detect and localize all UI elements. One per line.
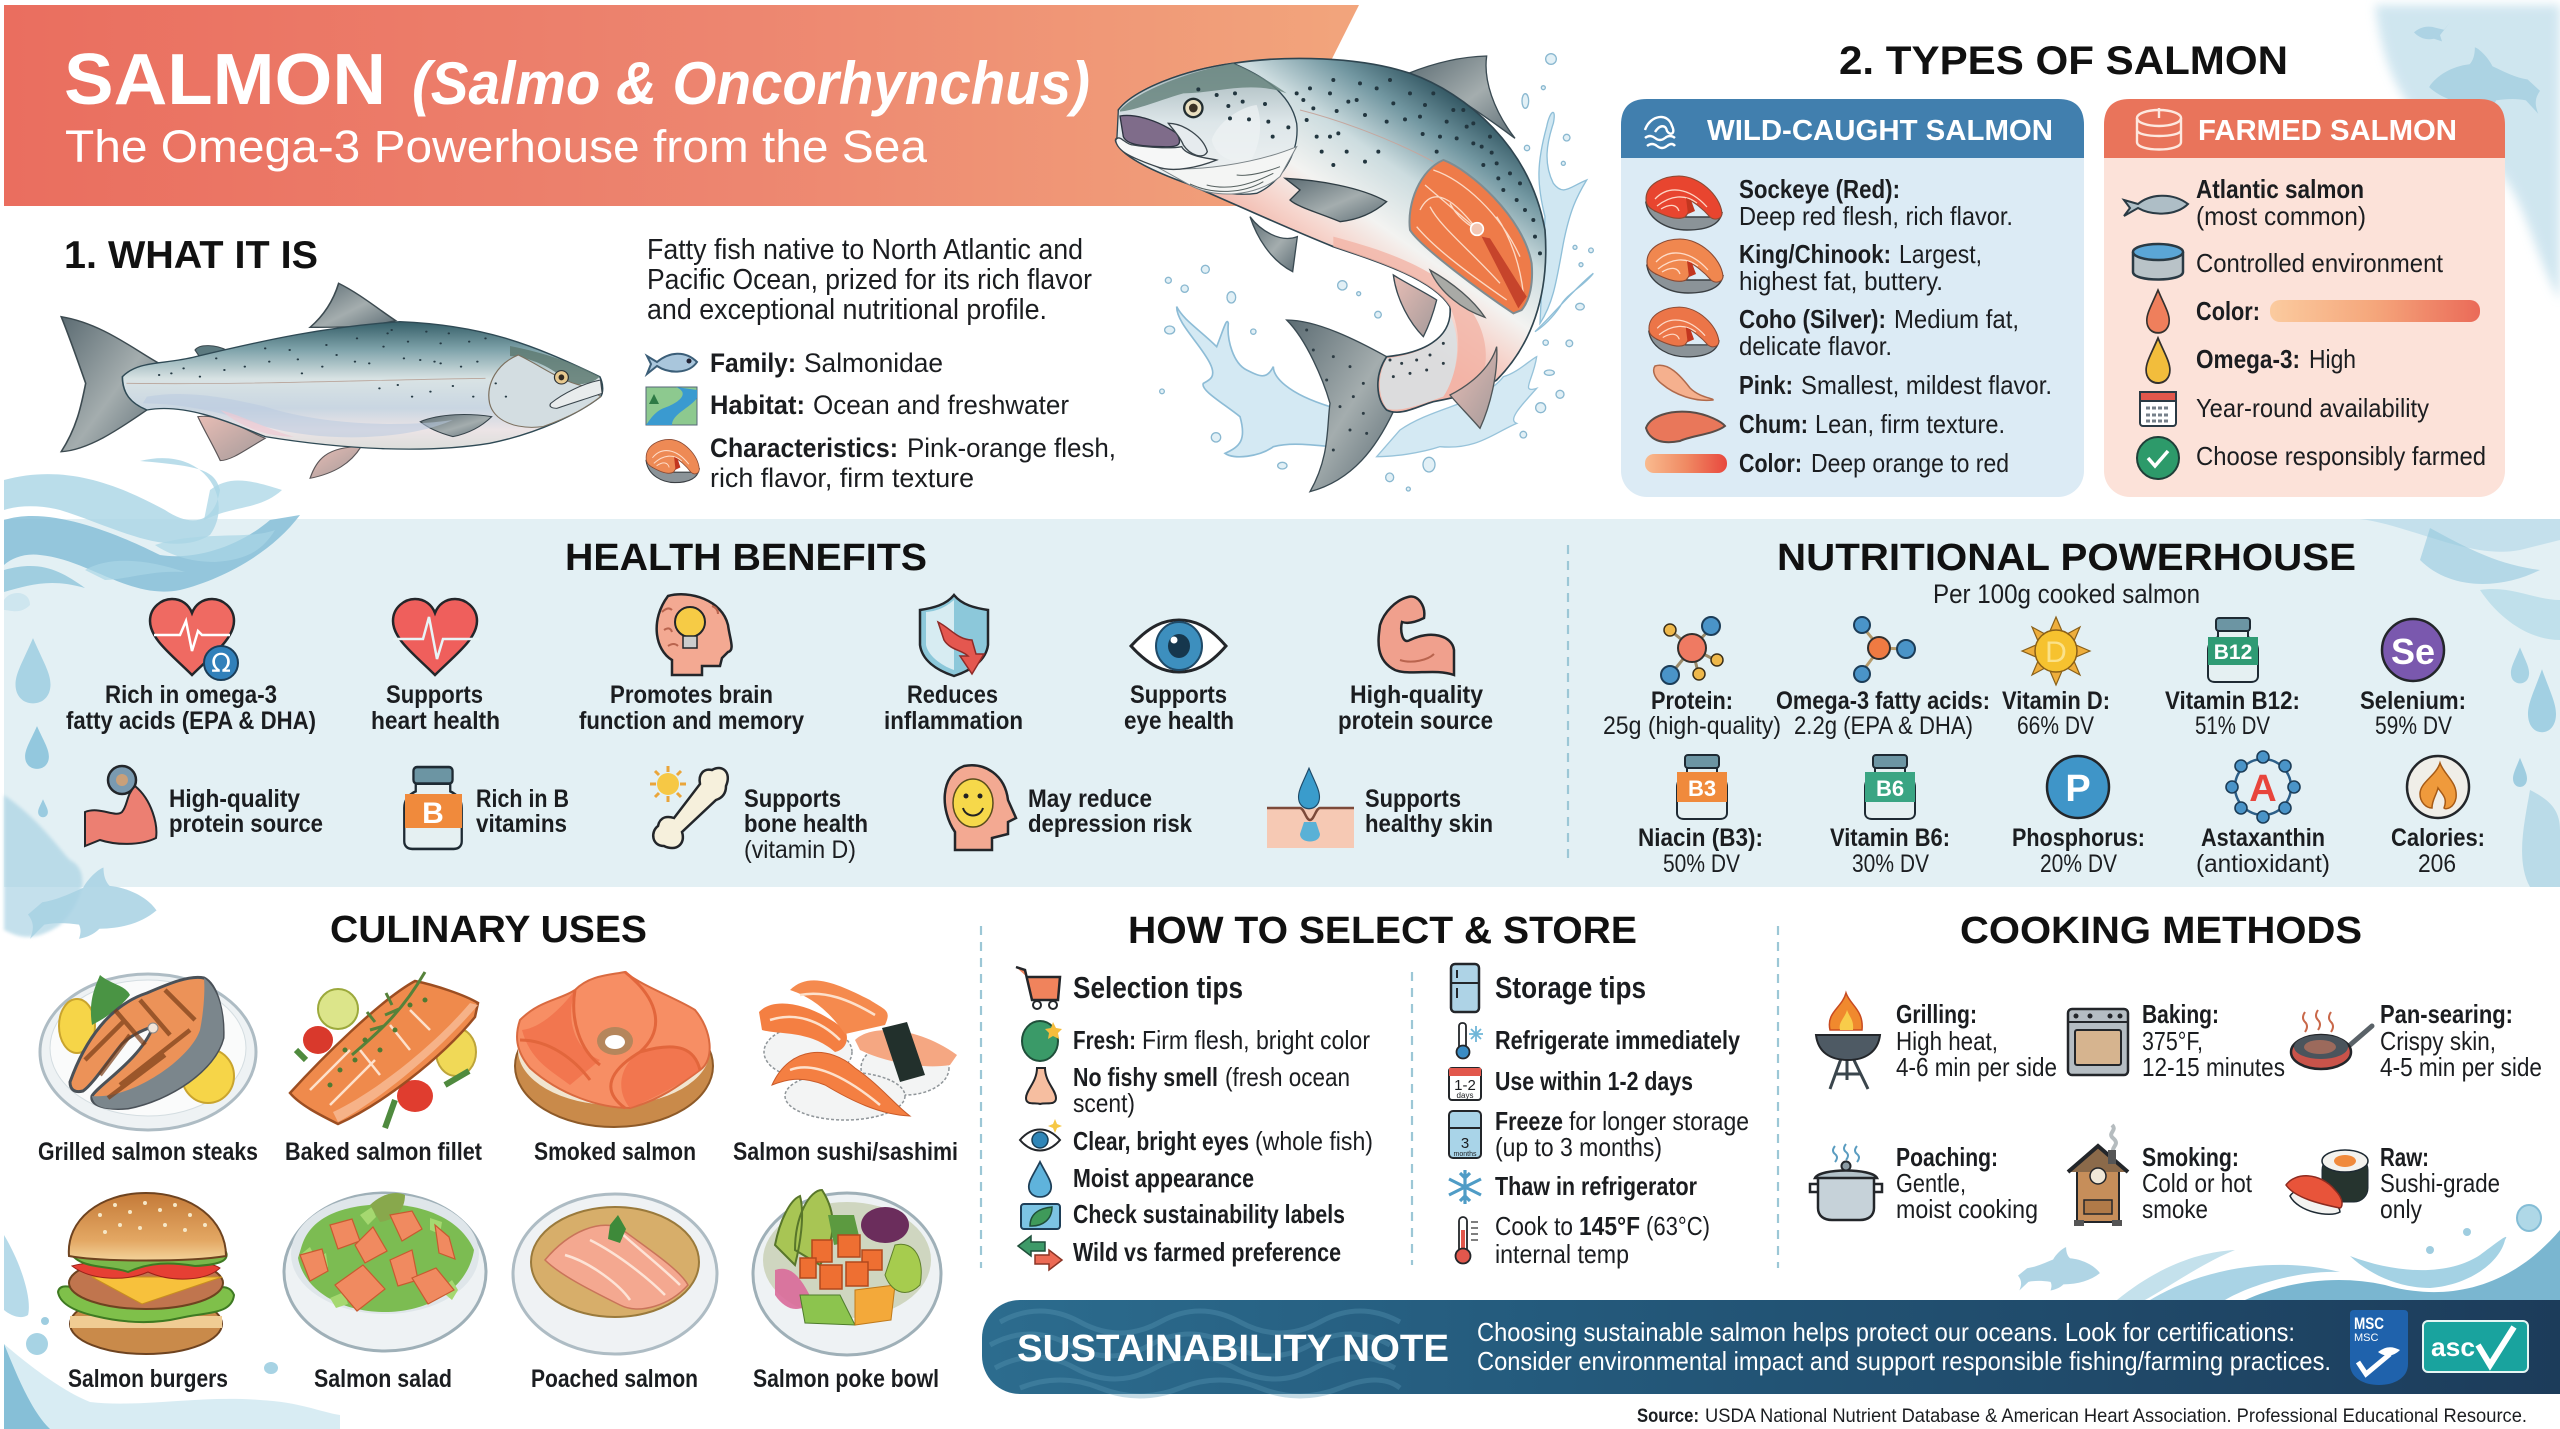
nutrient: phosphorus: Phosphorus: (2012, 824, 2145, 852)
use within (1449, 1066, 1693, 1100)
description (647, 234, 1092, 326)
moist: Moist appearance (1073, 1163, 1254, 1193)
method: grilling: High heat, (1896, 1026, 1998, 1056)
heading: HOW TO SELECT & STORE (1128, 910, 1637, 952)
eyes (1020, 1119, 1373, 1156)
nutrient: vitamin d (2002, 617, 2110, 740)
nutrient: vitamin b6: Vitamin B6: (1830, 824, 1950, 852)
description: Fatty fish native to North Atlantic and (647, 234, 1083, 266)
description: and exceptional nutritional profile. (647, 294, 1047, 326)
nutrient: calories: 206 (2418, 850, 2456, 878)
section: culinary uses (38, 909, 958, 1393)
food: smoked salmon bagel (515, 972, 713, 1127)
benefit: mood: depression risk (1028, 810, 1192, 838)
method: baking: 375°F, (2142, 1026, 2203, 1056)
pink (1654, 365, 2052, 400)
food labels: Poached salmon (531, 1365, 698, 1393)
benefit: skin: Supports (1365, 785, 1461, 813)
nutrient: vitamin b12: Vitamin B12: (2165, 687, 2300, 715)
section: nutritional powerhouse (1603, 537, 2485, 878)
benefit: bone: (vitamin D) (744, 836, 856, 864)
habitat row (646, 387, 1069, 425)
food labels: Grilled salmon steaks (38, 1138, 258, 1166)
benefit: b vitamins (404, 767, 569, 849)
heading: HEALTH BENEFITS (565, 537, 927, 579)
source line: Source: (1637, 1406, 1699, 1427)
nutrient: protein: Protein: (1651, 687, 1733, 715)
benefit: protein dumbbell arm: protein source (169, 810, 323, 838)
banner background (982, 1300, 2560, 1394)
method: baking: 12-15 minutes (2142, 1052, 2285, 1082)
cook to: (63°C) (1646, 1211, 1710, 1241)
characteristics row (646, 433, 1116, 493)
section: types of salmon (1621, 39, 2505, 497)
chum: Lean, firm texture. (1815, 409, 2005, 439)
method: raw sushi: Raw: (2380, 1142, 2429, 1172)
colour: Color: (1739, 448, 1802, 478)
banner wave pattern (990, 1311, 1400, 1396)
food: salmon burger (58, 1193, 234, 1354)
tail fin (1287, 320, 1393, 492)
coho: Coho (Silver): (1739, 304, 1886, 334)
nutrient: omega-3: Omega-3 fatty acids: (1776, 687, 1990, 715)
colour: Deep orange to red (1811, 448, 2009, 478)
benefit: brain: Promotes brain (610, 681, 773, 709)
icon: wave (1645, 117, 1675, 148)
icon: cart (1016, 967, 1060, 1009)
nutrient: calories: Calories: (2391, 824, 2485, 852)
nutrient: vitamin b6: B6 (1876, 776, 1904, 801)
benefit: heart health: Supports (386, 681, 483, 709)
smell: (fresh ocean (1225, 1062, 1350, 1092)
method: poaching: Gentle, (1896, 1168, 1966, 1198)
food labels: Salmon poke bowl (753, 1365, 939, 1393)
title: SALMON (64, 40, 386, 120)
controlled: Controlled environment (2196, 248, 2444, 278)
fresh: Fresh: (1073, 1025, 1136, 1055)
illustration: side view salmon (61, 283, 603, 478)
responsibly farmed: Choose responsibly farmed (2196, 441, 2486, 471)
description: Pacific Ocean, prized for its rich flavor (647, 264, 1092, 296)
section: health benefits (66, 537, 1493, 864)
cook to (1456, 1211, 1710, 1269)
nutrient: selenium: 59% DV (2375, 712, 2452, 740)
rear fins (1430, 270, 1497, 428)
method: poaching (1810, 1142, 2038, 1224)
nutrient: selenium (2360, 619, 2466, 740)
heading: 2. TYPES OF SALMON (1839, 39, 2288, 83)
belly pink (1333, 237, 1486, 397)
use within: 1-2 (1454, 1077, 1476, 1094)
coho: Medium fat, (1894, 304, 2019, 334)
method: smoking (2068, 1125, 2253, 1226)
nutrient: niacin: 50% DV (1663, 850, 1740, 878)
eye (1183, 98, 1204, 118)
cutaway salmon steak (1409, 160, 1532, 313)
smell: No fishy smell (1073, 1062, 1218, 1092)
wild header (1621, 99, 2084, 158)
nutrient: phosphorus: 20% DV (2040, 850, 2117, 878)
nutrient: astaxanthin: A (2249, 768, 2277, 810)
omega (2146, 338, 2356, 383)
icon: tank (2137, 108, 2181, 150)
benefit: omega-3: Rich in omega-3 (105, 681, 277, 709)
atlantic (2124, 174, 2366, 231)
nutrient: astaxanthin: Astaxanthin (2201, 824, 2325, 852)
cook to: 145°F (1579, 1211, 1640, 1241)
cook to: internal temp (1495, 1239, 1629, 1269)
selection tips (1016, 967, 1373, 1270)
moist (1029, 1162, 1254, 1197)
food: salmon salad (284, 1193, 486, 1351)
characteristics row: Characteristics: (710, 433, 898, 463)
pink: Pink: (1739, 370, 1793, 400)
icon: fridge (1451, 964, 1479, 1012)
food labels: Baked salmon fillet (285, 1138, 483, 1166)
selection tips: Selection tips (1073, 970, 1243, 1005)
method: grilling: 4-6 min per side (1896, 1052, 2057, 1082)
habitat row: Ocean and freshwater (813, 390, 1069, 420)
nutrient: phosphorus: P (2065, 768, 2091, 810)
benefit: brain: function and memory (579, 707, 804, 735)
nutrient: astaxanthin: (antioxidant) (2196, 850, 2330, 878)
benefit: eye: eye health (1124, 707, 1234, 735)
storage tips: Storage tips (1495, 970, 1646, 1005)
nutrient: vitamin b12: 51% DV (2195, 712, 2270, 740)
benefit: skin (1267, 768, 1493, 848)
note text (1477, 1317, 2331, 1376)
heading: COOKING METHODS (1960, 910, 2362, 952)
storage tips (1449, 964, 1749, 1269)
colour bar (2147, 290, 2480, 333)
panel: farmed salmon (2104, 99, 2505, 497)
freeze: for longer storage (1569, 1106, 1749, 1136)
colour (1645, 448, 2009, 478)
sockeye: Deep red flesh, rich flavor. (1739, 201, 2013, 231)
year round (2140, 392, 2429, 426)
logo: MSC: MSC (2354, 1332, 2378, 1344)
food labels: Smoked salmon (534, 1138, 696, 1166)
mouth (1120, 115, 1180, 147)
dorsal and lower fins (1250, 56, 1515, 337)
farmed header (2104, 99, 2505, 158)
icon: river landscape (646, 387, 697, 425)
benefit: inflammation: Reduces (907, 681, 998, 709)
benefit: eye: Supports (1130, 681, 1227, 709)
sockeye: Sockeye (Red): (1739, 174, 1900, 204)
benefit: brain (579, 594, 804, 735)
head (1117, 63, 1297, 194)
nutrient: niacin: B3 (1688, 776, 1716, 801)
colour bar: Color: (2196, 296, 2260, 326)
pink: Smallest, mildest flavor. (1801, 370, 2052, 400)
method: poaching: moist cooking (1896, 1194, 2038, 1224)
labels: Check sustainability labels (1073, 1199, 1345, 1229)
food labels: Salmon sushi/sashimi (733, 1138, 958, 1166)
smell (1026, 1062, 1350, 1118)
tail body silver wash (1380, 317, 1457, 410)
benefit: b vitamins: vitamins (476, 810, 567, 838)
nutrient: selenium: Se (2391, 631, 2435, 672)
method: smoking: Smoking: (2142, 1142, 2239, 1172)
section: cooking methods (1810, 910, 2542, 1226)
food: salmon poke bowl (753, 1190, 941, 1355)
benefit: skin: healthy skin (1365, 810, 1493, 838)
benefit: protein dumbbell arm: High-quality (169, 785, 300, 813)
freeze: months (1454, 1151, 1477, 1158)
nutrient: niacin: Niacin (B3): (1638, 824, 1763, 852)
benefit: heart health: heart health (371, 707, 500, 735)
cook to: Cook to (1495, 1211, 1573, 1241)
chum (1646, 409, 2005, 442)
freeze: 3 (1461, 1135, 1469, 1152)
method: raw sushi: only (2380, 1194, 2422, 1224)
panel: farmed salmon: FARMED SALMON (2198, 115, 2457, 147)
family row: Salmonidae (804, 348, 943, 378)
benefit: eye (1124, 620, 1234, 735)
benefit: protein muscle (1338, 597, 1493, 735)
icon: fish (647, 354, 697, 374)
benefit: b vitamins: Rich in B (476, 785, 569, 813)
nutrient: protein: 25g (high-quality) (1603, 712, 1781, 740)
method: pan-searing: Pan-searing: (2380, 999, 2513, 1029)
nutrient: omega-3 (1776, 617, 1990, 740)
habitat row: Habitat: (710, 390, 805, 420)
logo: ASC: asc (2431, 1332, 2475, 1362)
method: pan-searing: Crispy skin, (2380, 1026, 2496, 1056)
nutrient: vitamin b12 (2165, 618, 2300, 740)
sockeye (1646, 174, 2013, 231)
benefit: inflammation: inflammation (884, 707, 1023, 735)
wild vs farmed: Wild vs farmed preference (1073, 1237, 1341, 1267)
thaw (1449, 1170, 1697, 1204)
atlantic: (most common) (2196, 201, 2366, 231)
coho: delicate flavor. (1739, 331, 1892, 361)
atlantic: Atlantic salmon (2196, 174, 2364, 204)
source line: USDA National Nutrient Database & American Heart Association. Professional Educational Resource. (1705, 1406, 2527, 1427)
nutrient: vitamin b12: B12 (2214, 641, 2252, 664)
method: baking: Baking: (2142, 999, 2219, 1029)
food: poached salmon (513, 1194, 717, 1354)
method: raw sushi (2286, 1142, 2500, 1224)
sustainability note banner (982, 1300, 2560, 1396)
food: grilled salmon steaks (40, 974, 256, 1130)
refrigerate: Refrigerate immediately (1495, 1025, 1740, 1055)
fresh (1022, 1021, 1370, 1061)
family row: Family: (710, 348, 796, 378)
panel: wild-caught salmon (1621, 99, 2084, 497)
benefit: mood: May reduce (1028, 785, 1152, 813)
dashed column dividers (981, 545, 1778, 1268)
logo: MSC (2350, 1310, 2408, 1385)
omega: High (2309, 344, 2356, 374)
note text: Choosing sustainable salmon helps protect our oceans. Look for certifications: (1477, 1317, 2295, 1347)
header banner (4, 5, 1359, 206)
coho (1649, 304, 2019, 361)
benefit: b vitamins: B (422, 797, 444, 830)
heading: CULINARY USES (330, 909, 647, 951)
benefit: protein muscle: High-quality (1350, 681, 1483, 709)
nutrient: vitamin b6: 30% DV (1852, 850, 1929, 878)
benefit: bone: bone health (744, 810, 868, 838)
benefit: protein dumbbell arm (85, 766, 323, 846)
benefit: mood (945, 765, 1192, 850)
nutrient: protein (1603, 617, 1781, 740)
king (1647, 239, 1982, 296)
method: grilling: Grilling: (1896, 999, 1977, 1029)
wild vs farmed (1018, 1236, 1341, 1270)
icon: salmon steak (646, 439, 699, 483)
method: pan-searing (2291, 999, 2542, 1082)
method: poaching: Poaching: (1896, 1142, 1998, 1172)
food: salmon sushi and sashimi (759, 980, 957, 1120)
year round: Year-round availability (2196, 393, 2429, 423)
nutrient: vitamin d: 66% DV (2017, 712, 2094, 740)
pectoral fin (1285, 178, 1387, 222)
nutrient: niacin (1638, 755, 1763, 878)
benefit: bone: Supports (744, 785, 841, 813)
chum: Chum: (1739, 409, 1808, 439)
health and nutrition background band (4, 519, 2560, 887)
benefit: omega-3 (66, 599, 316, 735)
use within: days (1457, 1091, 1473, 1100)
heading: NUTRITIONAL POWERHOUSE (1777, 537, 2356, 579)
fresh: Firm flesh, bright color (1142, 1025, 1370, 1055)
king: King/Chinook: (1739, 239, 1891, 269)
benefit: omega-3: Ω (211, 649, 231, 679)
spots (1198, 80, 1540, 253)
freeze: Freeze (1495, 1106, 1563, 1136)
family row (647, 348, 943, 378)
body (1116, 58, 1546, 412)
logo: MSC: MSC (2354, 1314, 2384, 1333)
nutrient: omega-3: 2.2g (EPA & DHA) (1794, 712, 1973, 740)
benefit: bone (650, 766, 868, 864)
illustration: leaping salmon with splash (1116, 54, 1593, 492)
refrigerate (1456, 1023, 1740, 1058)
benefit: heart health (371, 599, 500, 735)
lateral line (1300, 110, 1433, 162)
use within: Use within 1-2 days (1495, 1066, 1693, 1096)
method: smoking: Cold or hot (2142, 1168, 2253, 1198)
characteristics row: Pink-orange flesh, (907, 433, 1116, 463)
method: raw sushi: Sushi-grade (2380, 1168, 2500, 1198)
thaw: Thaw in refrigerator (1495, 1171, 1697, 1201)
nutrient: calories (2391, 756, 2485, 878)
responsibly farmed (2137, 437, 2486, 479)
method: grilling (1816, 993, 2057, 1089)
controlled (2133, 244, 2444, 280)
omega: Omega-3: (2196, 344, 2300, 374)
section: how to select and store (1016, 910, 1749, 1270)
subheading: Per 100g cooked salmon (1933, 579, 2200, 609)
title (64, 40, 1090, 120)
eyes: (whole fish) (1255, 1126, 1373, 1156)
characteristics row: rich flavor, firm texture (710, 463, 974, 493)
section: what it is (61, 234, 1116, 493)
heading: 1. WHAT IT IS (64, 234, 318, 277)
method: baking (2068, 999, 2285, 1082)
nutrient: vitamin d: Vitamin D: (2002, 687, 2110, 715)
banner shape (4, 5, 1359, 206)
food labels: Salmon salad (314, 1365, 452, 1393)
food: baked salmon fillet (290, 972, 478, 1128)
freeze (1449, 1106, 1749, 1162)
title: (Salmo & Oncorhynchus) (412, 50, 1090, 117)
nutrient: astaxanthin (2196, 751, 2330, 878)
splash (1160, 54, 1593, 491)
method: smoking: smoke (2142, 1194, 2208, 1224)
note text: Consider environmental impact and support responsible fishing/farming practices. (1477, 1346, 2331, 1376)
nutrient: vitamin d: D (2045, 636, 2067, 669)
king: highest fat, buttery. (1739, 266, 1943, 296)
freeze: (up to 3 months) (1495, 1132, 1662, 1162)
nutrient: selenium: Selenium: (2360, 687, 2466, 715)
subtitle: The Omega-3 Powerhouse from the Sea (65, 121, 928, 172)
smell: scent) (1073, 1088, 1135, 1118)
food labels: Salmon burgers (68, 1365, 228, 1393)
benefit: protein muscle: protein source (1338, 707, 1493, 735)
eyes: Clear, bright eyes (1073, 1126, 1249, 1156)
nutrient: phosphorus (2012, 756, 2145, 878)
note heading: SUSTAINABILITY NOTE (1017, 1328, 1449, 1370)
food labels (38, 1138, 958, 1393)
benefit: inflammation (884, 595, 1023, 735)
king: Largest, (1899, 239, 1982, 269)
panel: wild-caught salmon: WILD-CAUGHT SALMON (1707, 115, 2053, 147)
logo: ASC (2423, 1321, 2528, 1372)
nutrient: vitamin b6 (1830, 755, 1950, 878)
benefit: omega-3: fatty acids (EPA & DHA) (66, 707, 316, 735)
